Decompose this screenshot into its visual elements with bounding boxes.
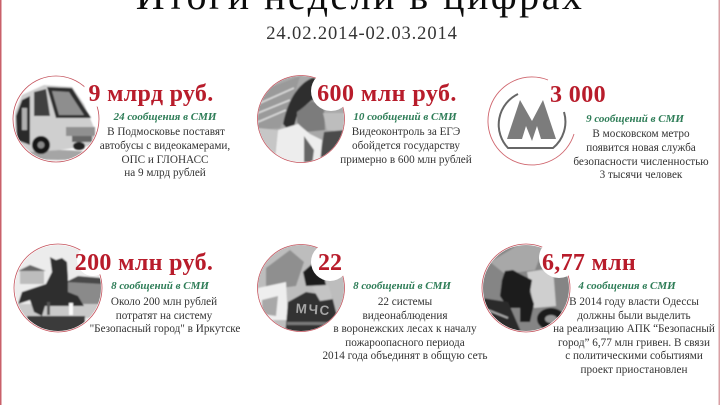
description: появится новая служба	[586, 142, 696, 154]
media mentions: 10 сообщений в СМИ	[353, 111, 457, 123]
description: Видеоконтроль за ЕГЭ	[352, 126, 460, 138]
media mentions: 4 сообщения в СМИ	[577, 280, 676, 292]
media mentions: 8 сообщений в СМИ	[111, 280, 209, 292]
description: 3 тысячи человек	[600, 169, 683, 181]
description: в воронежских лесах к началу	[333, 323, 477, 335]
panel: Voronezh forest cameras	[255, 243, 488, 362]
description: автобусы с видеокамерами,	[100, 140, 230, 152]
description: ОПС и ГЛОНАСС	[121, 154, 209, 166]
grey ring arc	[499, 94, 565, 148]
label on rescuer jacket: МЧС	[295, 301, 331, 318]
white notch behind figure	[84, 73, 118, 107]
description: с политическими событиями	[565, 350, 703, 362]
description: 2014 года объединят в общую сеть	[322, 350, 488, 362]
figure: 22	[318, 250, 342, 276]
figure: 200 млн руб.	[75, 250, 213, 276]
icon: metro logo in circle	[488, 77, 574, 165]
panel: bus contract	[13, 73, 230, 179]
icon: protester photo in circle	[480, 243, 572, 335]
panel: safe city Irkutsk	[14, 244, 240, 336]
panel: exam video monitoring	[255, 71, 472, 166]
description: безопасности численностью	[573, 156, 709, 168]
description: должны были выделить	[577, 310, 691, 322]
figure: 3 000	[550, 82, 606, 108]
description: 22 системы	[378, 296, 433, 308]
description: потратят на систему	[116, 310, 213, 322]
description: В Подмосковье поставят	[107, 126, 225, 138]
description: Около 200 млн рублей	[111, 296, 217, 308]
description: город” 6,77 млн гривен. В связи	[558, 337, 710, 349]
description: В московском метро	[592, 128, 690, 140]
icon: Irkutsk monument photo in circle	[14, 244, 104, 336]
panel: Odessa security system	[480, 238, 715, 376]
figure: 600 млн руб.	[317, 81, 457, 107]
white notch behind figure	[77, 244, 109, 276]
description: на реализацию АПК “Безопасный	[553, 323, 715, 335]
icon: rescuer photo in circle	[255, 243, 347, 336]
white notch behind figure	[311, 243, 349, 281]
icon: bus photo in circle	[13, 76, 99, 162]
description: на 9 млрд рублей	[124, 167, 206, 179]
description: обойдется государству	[352, 140, 460, 152]
white notch behind figure	[539, 238, 579, 278]
description: пожароопасного периода	[345, 337, 465, 349]
description: В 2014 году власти Одессы	[569, 296, 699, 308]
description: "Безопасный город" в Иркутске	[90, 323, 240, 335]
media mentions: 24 сообщения в СМИ	[113, 111, 217, 123]
description: примерно в 600 млн рублей	[340, 154, 472, 166]
red ring arc	[488, 77, 574, 165]
left page border	[0, 0, 2, 405]
media mentions: 8 сообщений в СМИ	[353, 280, 451, 292]
panel: metro security	[488, 77, 709, 181]
letter M	[507, 100, 556, 141]
description: проект приостановлен	[581, 364, 687, 376]
description: видеонаблюдения	[362, 310, 448, 322]
media mentions: 9 сообщений в СМИ	[586, 113, 684, 125]
figure: 9 млрд руб.	[88, 81, 214, 107]
white notch behind figure	[311, 71, 351, 111]
right page border	[718, 0, 720, 405]
figure: 6,77 млн	[542, 250, 636, 276]
icon: student photo in circle	[255, 74, 347, 166]
date range subtitle: 24.02.2014-02.03.2014	[266, 24, 458, 44]
